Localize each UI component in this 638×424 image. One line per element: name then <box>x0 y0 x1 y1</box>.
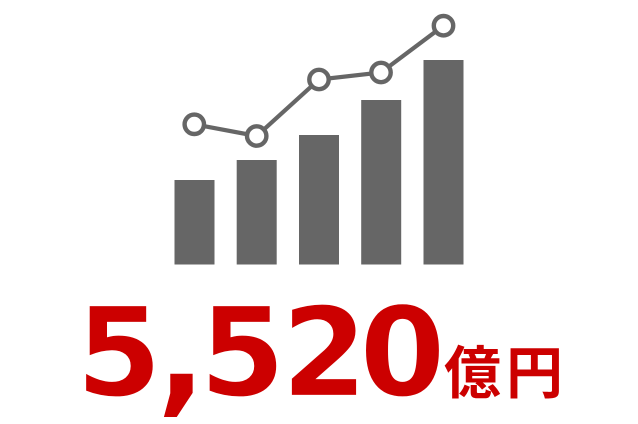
unit: yen: 円 <box>506 328 563 410</box>
digit 5: 5 <box>200 282 285 424</box>
line chart <box>185 16 453 146</box>
unit: oku: 億 <box>444 328 501 410</box>
bar 5 <box>424 60 464 264</box>
digit 5: 5 <box>76 282 162 424</box>
digit 2: 2 <box>282 282 367 424</box>
bar 1 <box>174 180 214 264</box>
bar chart <box>174 60 464 264</box>
headline value <box>76 274 445 424</box>
digit 0: 0 <box>360 282 445 424</box>
bar 4 <box>361 100 401 264</box>
bar 3 <box>299 135 339 264</box>
trend line <box>194 26 444 136</box>
data points <box>185 16 453 146</box>
bar 2 <box>237 160 277 264</box>
unit label <box>444 328 563 410</box>
